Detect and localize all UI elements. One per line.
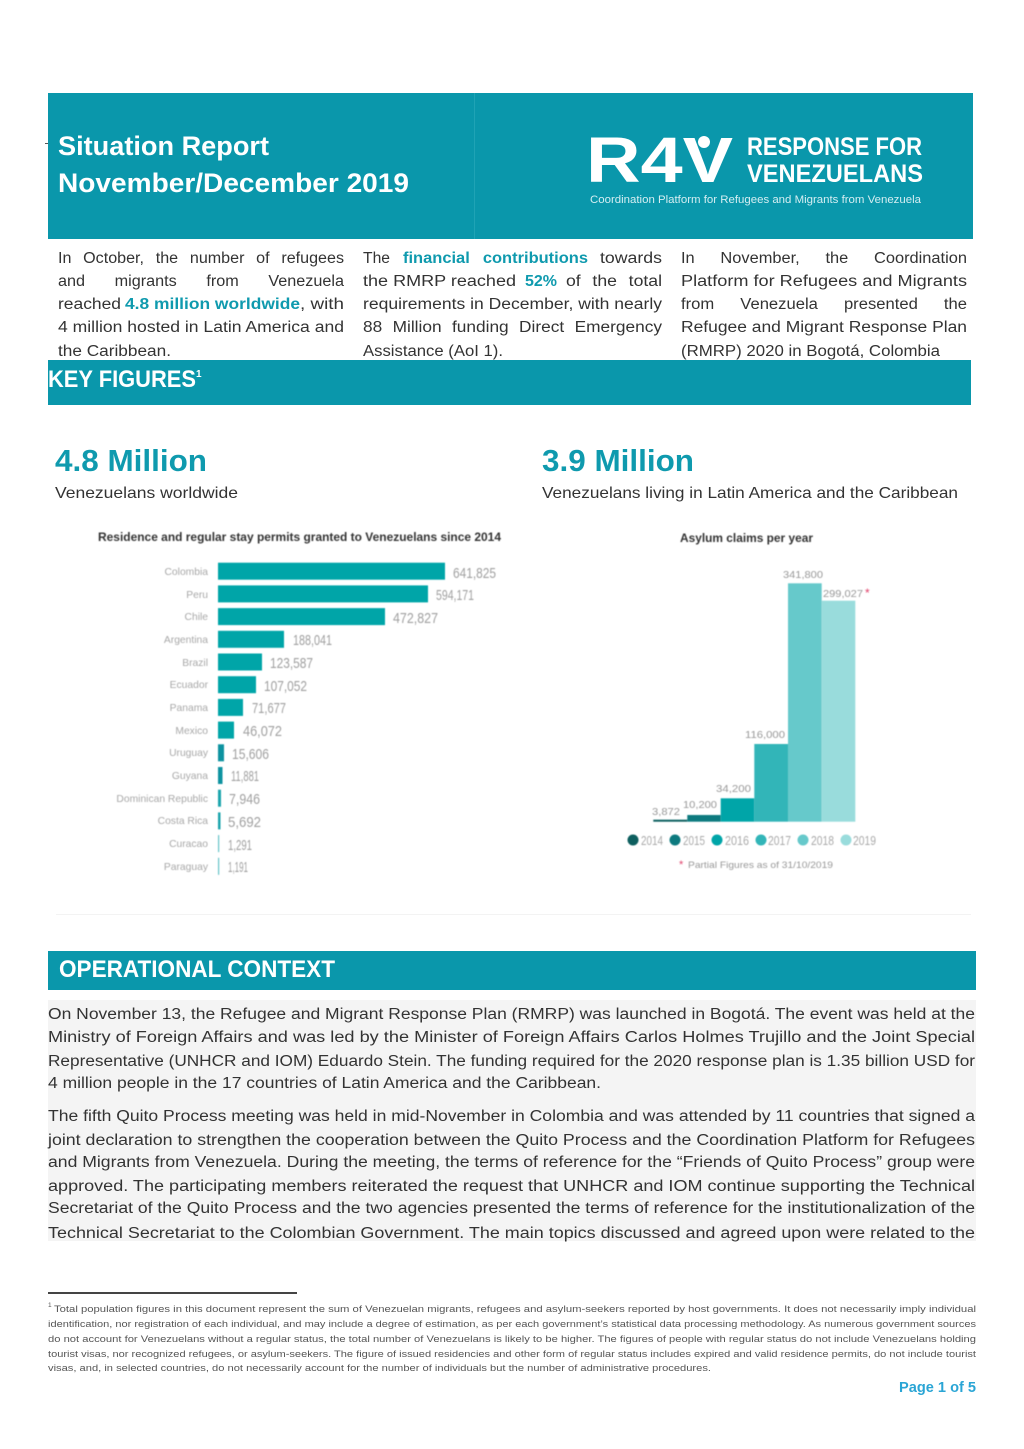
- key figure: Latin America: [542, 443, 958, 502]
- summary column: response plan: Platform for Refugees and Migrants: [681, 273, 967, 290]
- bar chart: residence permits: Brazil: [182, 658, 208, 669]
- column chart: asylum claims: 116,000: [745, 729, 785, 741]
- bar chart: residence permits: Argentina: [164, 635, 208, 646]
- footnote: identification, nor registration of each individual, and may include a degree of estimation, as per each government’s statistical data processing methodology. As numerous government sources: [48, 1319, 976, 1330]
- summary column: refugee numbers: , with: [300, 296, 344, 313]
- bar chart: residence permits: Mexico: [175, 726, 208, 737]
- footnote: 1: [48, 1302, 52, 1309]
- footnote: visas, and, in selected countries, do not necessarily account for the number of individuals but the number of administrative procedures.: [48, 1363, 711, 1374]
- bar chart: residence permits: Panama: [170, 703, 208, 714]
- page number: Page 1 of 5: [899, 1380, 976, 1396]
- column chart: asylum claims: 34,200: [716, 783, 751, 795]
- operational context body: [47, 1000, 976, 1242]
- bar chart: residence permits: Costa Rica: [158, 816, 208, 827]
- summary column: financial contributions: towards: [600, 250, 662, 267]
- summary column: response plan: In November, the Coordination: [681, 250, 967, 267]
- paragraph: response plan launch: [48, 1006, 975, 1092]
- legend: 2018: [811, 833, 834, 848]
- column chart: asylum claims: *: [865, 586, 870, 600]
- paragraph: Quito Process: and Migrants from Venezuela. During the meeting, the terms of reference for the “Friends of Quito Process” group were: [48, 1154, 975, 1171]
- summary column: financial contributions: The: [363, 250, 390, 267]
- paragraph: Quito Process: The fifth Quito Process meeting was held in mid-November in Colombia and was attended by 11 countries that signed a: [48, 1108, 975, 1125]
- bar chart: residence permits: Ecuador: [170, 680, 209, 691]
- summary column: financial contributions: of the total: [566, 273, 662, 290]
- bar chart: residence permits: 5,692: [228, 814, 261, 831]
- column chart: asylum claims: 341,800: [783, 569, 823, 581]
- bar chart: residence permits: 594,171: [436, 587, 474, 604]
- paragraph: response plan launch: On November 13, the Refugee and Migrant Response Plan (RMRP) was launched in Bogotá. The event was held at the: [48, 1006, 975, 1023]
- column chart: asylum claims: [628, 533, 876, 871]
- summary column: refugee numbers: and migrants from Venezuela: [58, 273, 344, 290]
- legend: 2015: [683, 833, 705, 848]
- summary column: refugee numbers: [58, 250, 344, 360]
- key figure: worldwide: 4.8 Million: [55, 443, 207, 478]
- paragraph: Quito Process: Secretariat of the Quito Process and the two agencies presented the terms of reference for the institutionalization of the: [48, 1200, 975, 1217]
- bar chart: residence permits: Colombia: [164, 567, 208, 578]
- chart footnote: *: [679, 859, 684, 871]
- bar chart: residence permits: Dominican Republic: [116, 794, 208, 805]
- footnote: tourist visas, nor recognized refugees, or asylum-seekers. The figure of issued residencies and other form of regular status includes expired and valid residence permits, do not include tourist: [48, 1349, 976, 1360]
- R4V logo: Coordination Platform for Refugees and Migrants from Venezuela: [590, 194, 922, 206]
- legend: 2016: [725, 833, 749, 848]
- bar chart: residence permits: 15,606: [232, 746, 269, 763]
- paragraph: Quito Process: Technical Secretariat to the Colombian Government. The main topics discussed and agreed upon were related to the: [48, 1225, 975, 1242]
- summary column: financial contributions: 52%: [525, 273, 557, 290]
- key figure: Latin America: 3.9 Million: [542, 443, 694, 478]
- footnote: Total population figures in this document represent the sum of Venezuelan migrants, refugees and asylum-seekers reported by host governments. It does not necessarily imply individual: [54, 1304, 976, 1315]
- bar chart: residence permits: Paraguay: [164, 862, 209, 873]
- chart footnote: Partial Figures as of 31/10/2019: [688, 860, 833, 871]
- bar chart: residence permits: 188,041: [293, 632, 332, 649]
- summary column: financial contributions: Assistance (AoI 1).: [363, 343, 503, 360]
- legend: 2014: [641, 833, 663, 848]
- operational context heading: [48, 951, 976, 990]
- summary column: refugee numbers: reached: [58, 296, 121, 313]
- report title: [58, 131, 409, 198]
- bar chart: residence permits: Chile: [185, 612, 208, 623]
- report title: Situation Report: [58, 131, 269, 161]
- bar chart: residence permits: Guyana: [172, 771, 208, 782]
- footnote: [48, 1302, 976, 1374]
- paragraph: response plan launch: Representative (UNHCR and IOM) Eduardo Stein. The funding required for the 2020 response plan is 1.35 billion USD for: [48, 1053, 975, 1070]
- summary column: refugee numbers: the Caribbean.: [58, 343, 171, 360]
- summary column: financial contributions: 88 Million funding Direct Emergency: [363, 319, 662, 336]
- paragraph: Quito Process: [47, 1108, 975, 1242]
- key figure: worldwide: Venezuelans worldwide: [55, 485, 238, 502]
- legend: [628, 833, 876, 848]
- operational context heading: OPERATIONAL CONTEXT: [59, 956, 335, 983]
- bar chart: residence permits: 1,291: [228, 837, 252, 854]
- summary column: financial contributions: the RMRP reached: [363, 273, 516, 290]
- bar chart: residence permits: Peru: [186, 590, 208, 601]
- R4V logo: VENEZUELANS: [747, 160, 923, 188]
- bar chart: residence permits: [98, 532, 502, 876]
- bar chart: residence permits: 11,881: [231, 768, 259, 785]
- report title: November/December 2019: [58, 168, 409, 198]
- paragraph: response plan launch: Ministry of Foreign Affairs and was led by the Minister of Foreign Affairs Carlos Holmes Trujillo and the Joint Special: [48, 1029, 975, 1046]
- column chart: asylum claims: 3,872: [652, 806, 680, 818]
- summary column: response plan: (RMRP) 2020 in Bogotá, Colombia: [681, 343, 940, 360]
- summary column: refugee numbers: In October, the number of refugees: [58, 250, 344, 267]
- bar chart: residence permits: 1,191: [228, 859, 248, 876]
- bar chart: residence permits: 123,587: [270, 655, 313, 672]
- bar chart: residence permits: 7,946: [229, 791, 260, 808]
- header banner: [45, 93, 973, 239]
- summary column: financial contributions: financial contributions: [403, 250, 588, 267]
- paragraph: Quito Process: approved. The participating members reiterated the request that UNHCR and IOM continue supporting the Technical: [48, 1178, 975, 1195]
- R4V logo: R4V: [586, 124, 733, 196]
- key figure: Latin America: Venezuelans living in Latin America and the Caribbean: [542, 485, 958, 502]
- summary column: response plan: [681, 250, 967, 360]
- column chart: asylum claims: Asylum claims per year: [680, 533, 814, 545]
- R4V logo: RESPONSE FOR: [747, 133, 922, 161]
- summary column: refugee numbers: 4 million hosted in Latin America and: [58, 319, 344, 336]
- legend: 2017: [768, 833, 791, 848]
- key figure: worldwide: [55, 443, 238, 502]
- R4V logo: [586, 124, 923, 206]
- bar chart: residence permits: Curacao: [169, 839, 208, 850]
- bar chart: residence permits: Residence and regular stay permits granted to Venezuelans since 2014: [98, 532, 502, 544]
- bar chart: residence permits: 472,827: [393, 610, 438, 627]
- paragraph: Quito Process: joint declaration to strengthen the cooperation between the Quito Process and the Coordination Platform for Refugees: [47, 1132, 975, 1149]
- bar chart: residence permits: 71,677: [252, 700, 286, 717]
- summary column: response plan: Refugee and Migrant Response Plan: [681, 319, 967, 336]
- paragraph: response plan launch: 4 million people in the 17 countries of Latin America and the Caribbean.: [48, 1075, 601, 1092]
- column chart: asylum claims: 10,200: [683, 799, 717, 811]
- key figures heading: 1: [196, 369, 202, 380]
- summary column: refugee numbers: 4.8 million worldwide: [125, 296, 300, 313]
- column chart: asylum claims: 299,027: [823, 588, 863, 600]
- bar chart: residence permits: 641,825: [453, 565, 496, 582]
- summary column: response plan: from Venezuela presented the: [681, 296, 967, 313]
- key figures heading: KEY FIGURES: [48, 366, 196, 393]
- footnote: do not account for Venezuelans without a regular status, the total number of Venezuelans is likely to be higher. The figures of people with regular status do not include Venezuelans holding: [48, 1334, 976, 1345]
- bar chart: residence permits: 46,072: [243, 723, 282, 740]
- bar chart: residence permits: Uruguay: [169, 748, 209, 759]
- summary column: financial contributions: [363, 250, 662, 360]
- key figures heading: [48, 360, 971, 405]
- legend: 2019: [853, 833, 876, 848]
- summary column: financial contributions: requirements in December, with nearly: [363, 296, 662, 313]
- bar chart: residence permits: 107,052: [264, 678, 307, 695]
